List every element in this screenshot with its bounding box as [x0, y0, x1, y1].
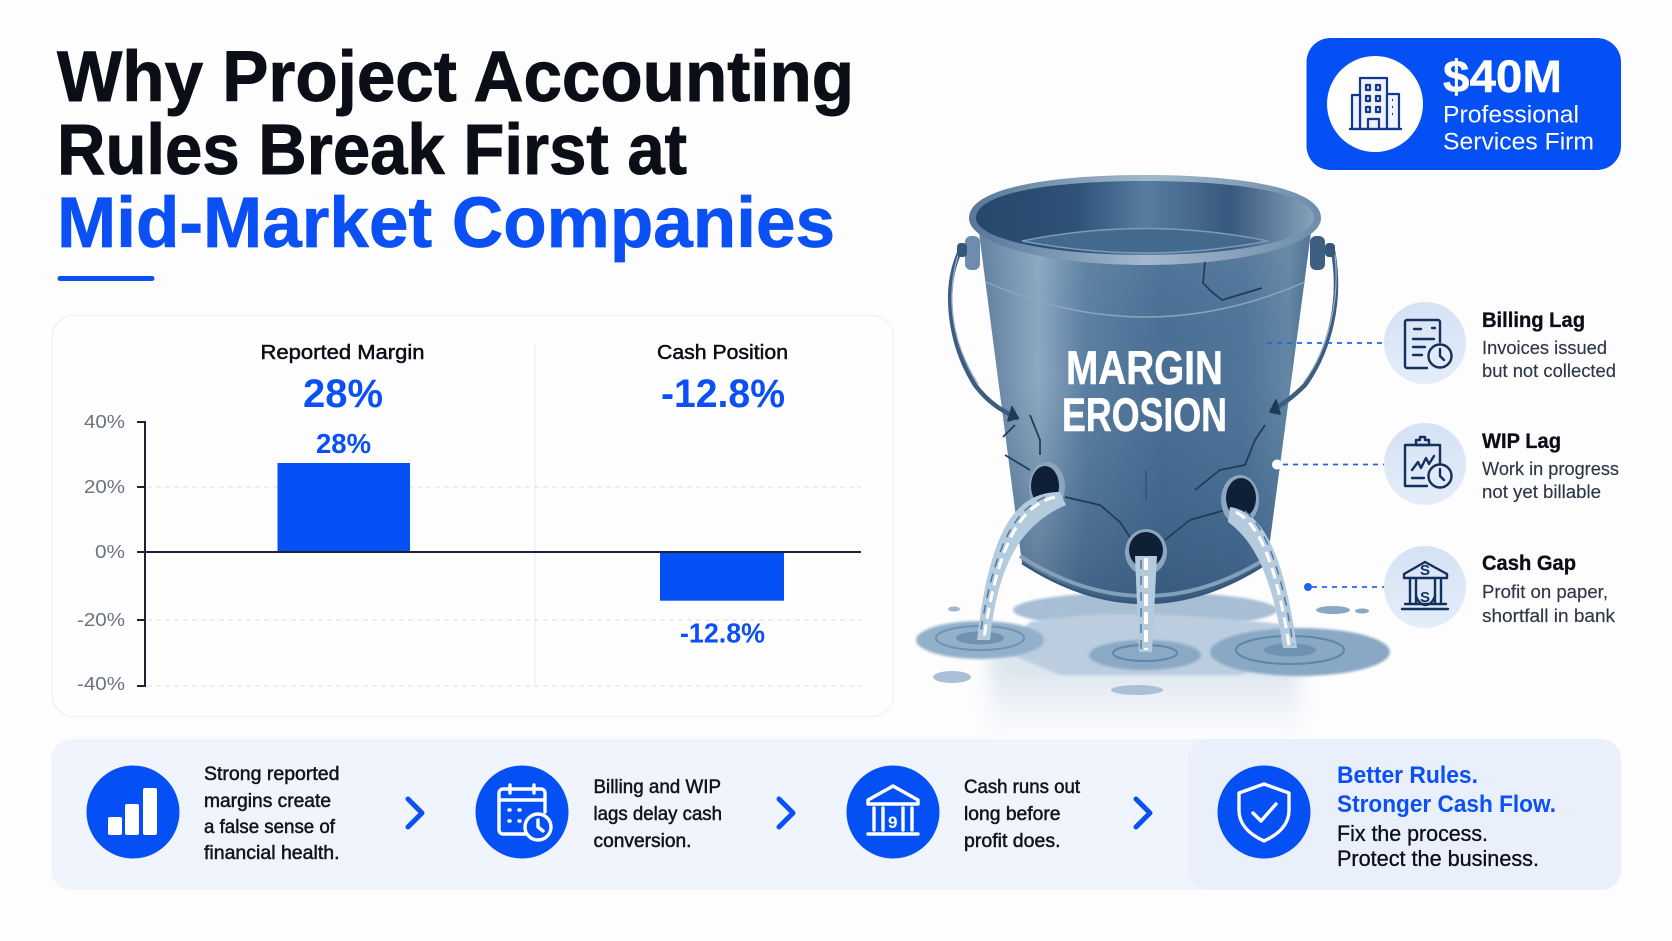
- connector: billing lag: [1267, 342, 1384, 344]
- bar chart: [77, 343, 861, 694]
- title: Mid-Market Companies: [57, 184, 835, 263]
- title underline: [58, 276, 154, 281]
- bar label: 28%: 28%: [316, 428, 371, 459]
- badge description: [1443, 102, 1594, 155]
- callout: billing lag: [1384, 302, 1616, 384]
- icon glyphs: S: [1420, 589, 1430, 606]
- icon glyphs: [1420, 562, 1430, 606]
- icon: invoice with clock: [1405, 320, 1452, 368]
- bar label: -12.8%: -12.8%: [680, 618, 765, 649]
- callout text: [1482, 581, 1616, 626]
- bucket body: [978, 225, 1312, 603]
- step text: cash runs out: [964, 776, 1081, 852]
- headline: better rules, stronger cash flow: Better Rules.: [1337, 762, 1478, 789]
- bar: cash position: [660, 552, 784, 601]
- panel: margin vs cash chart: [52, 316, 894, 716]
- badge description: Professional: [1443, 102, 1579, 129]
- heading: cash position: Cash Position: [657, 341, 788, 364]
- step text: false sense of health: Strong reported: [204, 763, 340, 785]
- panel: causal chain strip: [51, 739, 1621, 890]
- step text: false sense of health: [204, 763, 340, 864]
- callout: cash gap: [1384, 546, 1616, 628]
- axes: [137, 422, 861, 686]
- callout title: Billing Lag: [1482, 309, 1585, 332]
- connector: cash gap: [1304, 583, 1384, 591]
- step text: cash runs out: profit does.: [964, 830, 1060, 852]
- step text: billing and WIP lags: [594, 776, 722, 852]
- title: [57, 38, 854, 263]
- callout text: Profit on paper,: [1482, 581, 1608, 602]
- bucket rim and inside: [969, 175, 1321, 265]
- step text: cash runs out: Cash runs out: [964, 776, 1081, 798]
- icon: bank circle: 9: [888, 813, 897, 832]
- step text: billing and WIP lags: Billing and WIP: [594, 776, 721, 798]
- axis labels: 0%: [95, 542, 125, 562]
- bucket handle: [950, 251, 1336, 418]
- callout text: Work in progress: [1482, 458, 1619, 479]
- icon: office building: [1349, 78, 1402, 129]
- panel: better rules: [1188, 739, 1621, 890]
- axis labels: 20%: [84, 477, 125, 497]
- title: Rules Break First at: [57, 111, 687, 190]
- axis labels: -20%: [77, 610, 125, 630]
- axis labels: 40%: [84, 412, 125, 432]
- water streams: [977, 492, 1297, 652]
- icon: bar chart circle: [86, 766, 180, 858]
- icon: leaking bucket: [916, 175, 1390, 735]
- callout title: WIP Lag: [1482, 430, 1561, 453]
- bucket lugs: [957, 236, 1335, 270]
- heading: reported margin: Reported Margin: [260, 341, 424, 364]
- icon: calendar with clock circle: [476, 766, 568, 858]
- callout title: Cash Gap: [1482, 552, 1576, 575]
- callout: WIP lag: [1384, 423, 1619, 505]
- text: fix the process: Fix the process.: [1337, 821, 1488, 846]
- icon: shield check circle: [1218, 766, 1310, 858]
- arrow: [408, 799, 422, 827]
- floor water: [916, 592, 1390, 735]
- stat: cash position -12.8%: -12.8%: [661, 372, 785, 416]
- callout text: [1482, 337, 1616, 381]
- step text: billing and WIP lags: conversion.: [594, 830, 692, 852]
- arrow: [779, 799, 793, 827]
- axis labels: -40%: [77, 674, 125, 694]
- axis labels: [77, 412, 125, 694]
- connector: WIP lag: [1272, 460, 1384, 470]
- step text: false sense of health: a false sense of: [204, 816, 336, 838]
- text: fix the process: [1337, 821, 1539, 871]
- step text: billing and WIP lags: lags delay cash: [594, 803, 722, 825]
- callout text: not yet billable: [1482, 481, 1601, 502]
- bucket label: [1062, 341, 1227, 441]
- arrow: [1136, 799, 1150, 827]
- badge: $40M professional services firm: [1306, 38, 1621, 170]
- step text: false sense of health: margins create: [204, 790, 331, 812]
- stat: reported margin 28%: 28%: [303, 372, 383, 416]
- icon: bank circle: [846, 766, 940, 858]
- badge description: Services Firm: [1443, 128, 1594, 155]
- bucket label: EROSION: [1062, 388, 1227, 441]
- badge value: $40M: [1443, 51, 1562, 102]
- step text: cash runs out: long before: [964, 803, 1060, 825]
- bucket label: MARGIN: [1066, 341, 1223, 394]
- headline: better rules, stronger cash flow: Stronger Cash Flow.: [1337, 791, 1556, 818]
- callout text: Invoices issued: [1482, 337, 1607, 358]
- bucket holes: [1029, 462, 1259, 575]
- icon: bank with dollar signs: [1402, 562, 1448, 609]
- text: fix the process: Protect the business.: [1337, 846, 1539, 871]
- callout text: [1482, 458, 1619, 502]
- bucket cracks: [1003, 262, 1280, 545]
- headline: better rules, stronger cash flow: [1337, 762, 1556, 818]
- bar: reported margin: [278, 463, 410, 552]
- callout text: but not collected: [1482, 360, 1616, 381]
- icon glyphs: S: [1420, 562, 1430, 579]
- title: Why Project Accounting: [57, 38, 854, 117]
- callout text: shortfall in bank: [1482, 605, 1616, 626]
- step text: false sense of health: financial health.: [204, 842, 340, 864]
- icon: clipboard with clock: [1405, 437, 1452, 488]
